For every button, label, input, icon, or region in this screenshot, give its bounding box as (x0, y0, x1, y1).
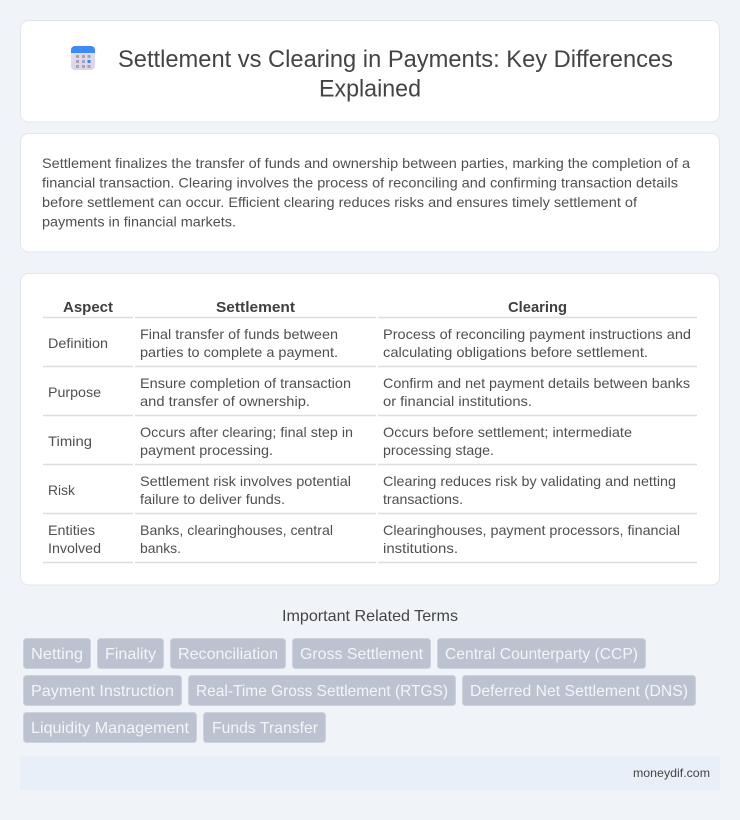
table row: risk: failure to deliver funds. (140, 491, 285, 507)
panel: introduction (20, 134, 720, 252)
tag list: related terms: Liquidity Management (31, 720, 190, 737)
footer (20, 756, 720, 790)
table row: timing: Occurs after clearing; final step in (140, 424, 353, 440)
table row: entities involved: Entities (48, 522, 95, 538)
panel: header card (20, 20, 720, 122)
tag list: related terms: Gross Settlement (300, 646, 424, 663)
tag list: related terms (24, 638, 696, 742)
table row: risk: transactions. (383, 491, 463, 507)
panel: comparison table (20, 274, 720, 585)
table row: entities involved: Involved (48, 540, 101, 556)
table row: definition: Final transfer of funds between (140, 326, 338, 342)
table row: risk (48, 473, 676, 507)
title: Settlement vs Clearing in Payments: Key Differences (118, 46, 673, 73)
table row: definition (48, 326, 691, 360)
table row: definition: parties to complete a payment. (140, 344, 338, 360)
table row: entities involved: Banks, clearinghouses, central (140, 522, 333, 538)
table row: timing: processing stage. (383, 442, 494, 458)
table row: timing: Occurs before settlement; intermediate (383, 424, 632, 440)
text block: introduction: payments in financial markets. (42, 214, 236, 230)
table header: Aspect (63, 299, 113, 316)
title: Explained (319, 76, 421, 102)
table row: definition: Process of reconciling payment instructions and (383, 326, 691, 342)
table row: timing: Timing (48, 433, 92, 449)
tag list: related terms: Payment Instruction (31, 683, 174, 700)
title (118, 46, 673, 102)
table header: Clearing (508, 299, 567, 316)
table row: purpose: Confirm and net payment details between banks (383, 375, 690, 391)
table row: timing (48, 424, 632, 458)
tag list: related terms: Central Counterparty (CCP) (445, 646, 638, 663)
tag list: related terms: Netting (31, 646, 83, 663)
table row: purpose: or financial institutions. (383, 393, 532, 409)
table row: entities involved: banks. (140, 540, 181, 556)
heading: important related terms: Important Related Terms (282, 608, 458, 625)
table row: purpose: and transfer of ownership. (140, 393, 310, 409)
table row: purpose: Ensure completion of transaction (140, 375, 351, 391)
tag list: related terms: Reconciliation (178, 646, 278, 663)
text block: introduction: Settlement finalizes the transfer of funds and ownership between parties, marking the completion of a (42, 155, 690, 171)
table header (63, 299, 567, 316)
text block: introduction: financial transaction. Clearing involves the process of reconciling and confirming transaction details (42, 174, 678, 190)
table row: entities involved: institutions. (383, 540, 458, 556)
table row: entities involved: Clearinghouses, payment processors, financial (383, 522, 680, 538)
table header: Settlement (216, 299, 295, 316)
tag list: related terms: Deferred Net Settlement (DNS) (470, 683, 688, 700)
table row: risk: Clearing reduces risk by validating and netting (383, 473, 676, 489)
table row: risk: Settlement risk involves potential (140, 473, 351, 489)
table row: definition: calculating obligations before settlement. (383, 344, 648, 360)
tag list: related terms: Finality (105, 646, 156, 663)
icon: calendar (71, 46, 95, 70)
footer: moneydif.com (633, 766, 710, 780)
text block: introduction (42, 155, 690, 230)
table row: purpose: Purpose (48, 384, 101, 400)
table row: timing: payment processing. (140, 442, 273, 458)
table row: purpose (48, 375, 690, 409)
text block: introduction: before settlement can occur. Efficient clearing reduces risks and ensures timely settlement of (42, 194, 637, 210)
tag list: related terms: Real-Time Gross Settlement (RTGS) (196, 683, 448, 700)
table row: entities involved (48, 522, 680, 556)
table row: definition: Definition (48, 335, 108, 351)
tag list: related terms: Funds Transfer (212, 720, 319, 737)
table row: risk: Risk (48, 482, 76, 498)
